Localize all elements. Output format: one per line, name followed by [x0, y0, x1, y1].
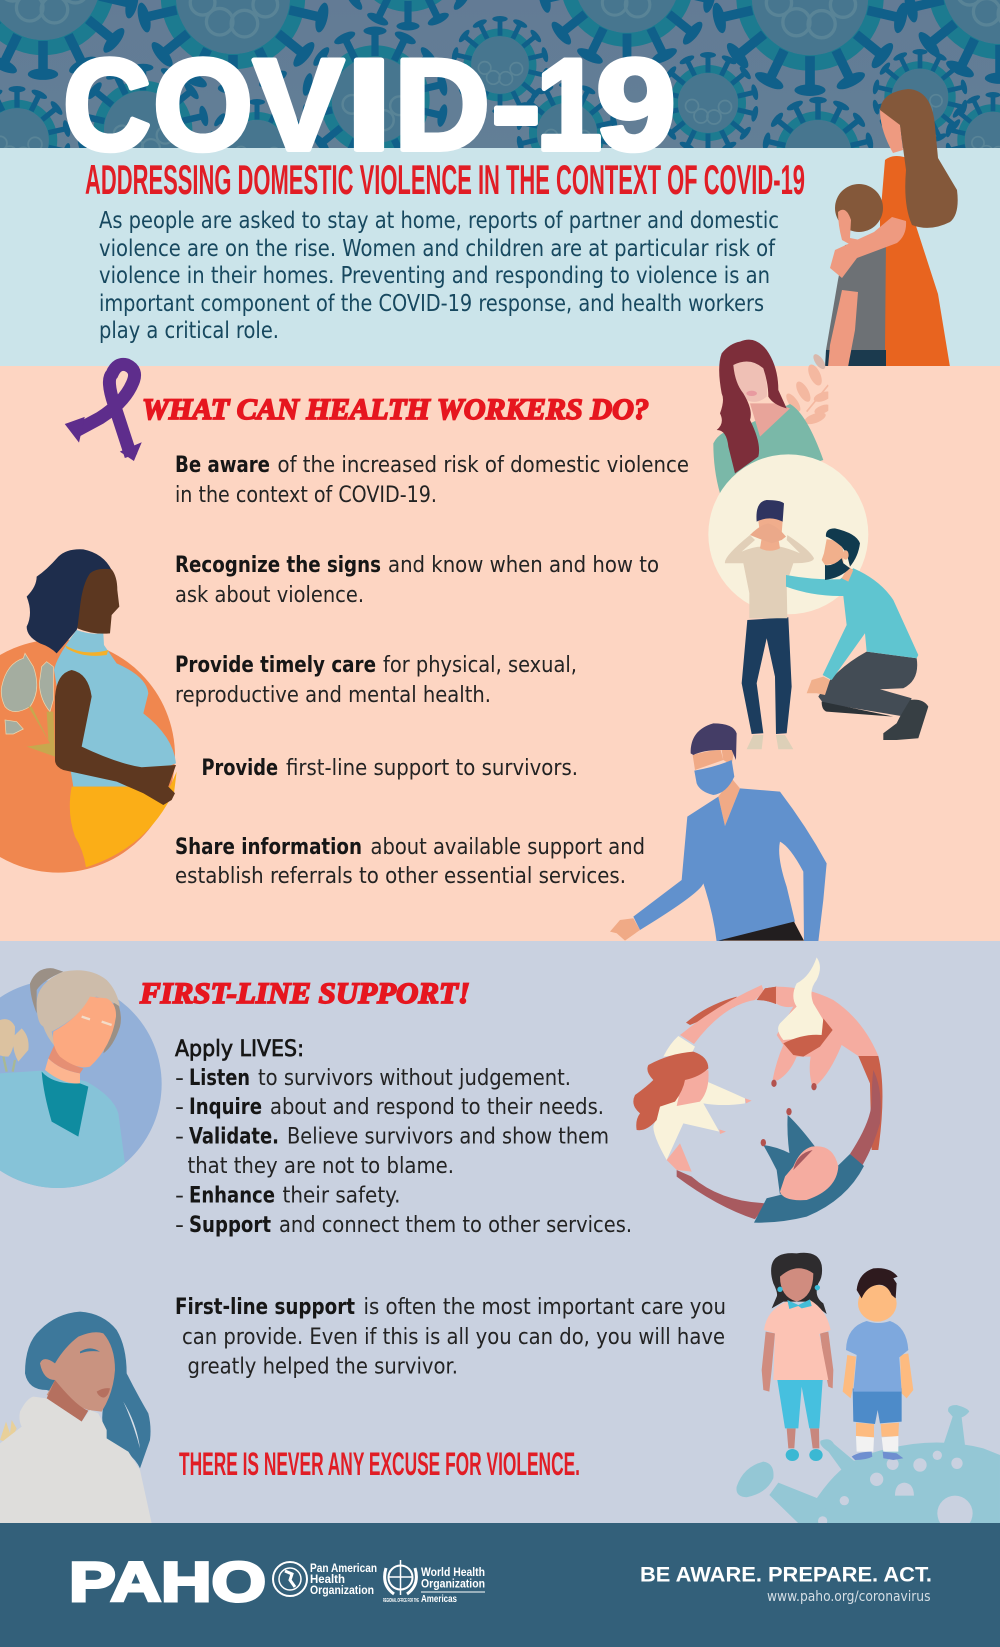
list: apply LIVES: - [175, 1184, 184, 1208]
illustration: woman with red hair [713, 340, 833, 493]
text block: recognize the signs: ask about violence. [175, 583, 364, 608]
illustration: man comforting another man [708, 454, 928, 749]
text block: first-line support note: is often the most important care you [364, 1295, 726, 1320]
logo: PAHO: Health [310, 1572, 345, 1586]
text block: provide timely care [175, 653, 577, 708]
text block: introduction paragraph: violence are on the rise. Women and children are at particular risk of [99, 236, 776, 262]
text block: first-line support note: greatly helped the survivor. [188, 1354, 458, 1380]
callout: never any excuse: THERE IS NEVER ANY EXCUSE FOR VIOLENCE. [179, 1446, 580, 1482]
title: COVID-19: C [63, 32, 151, 178]
illustration: pregnant woman [0, 549, 177, 873]
text block: introduction paragraph [99, 208, 779, 344]
title: COVID-19: O [153, 32, 253, 178]
text block: provide first-line support: first-line support to survivors. [286, 756, 578, 781]
heading: what can health workers do: WHAT CAN HEALTH WORKERS DO? [142, 393, 649, 426]
panel: introduction [0, 89, 1000, 367]
logo: PAHO [69, 1550, 377, 1613]
icon: purple ribbon [68, 364, 138, 458]
logo: World Health Organization: Organization [421, 1576, 485, 1590]
title: COVID-19 [63, 32, 676, 178]
list: apply LIVES [175, 1037, 632, 1238]
list: apply LIVES: their safety. [282, 1184, 400, 1208]
text block: recognize the signs: Recognize the signs [175, 553, 381, 578]
text block: first-line support note: First-line support [175, 1295, 355, 1320]
list: apply LIVES: - [175, 1095, 184, 1120]
title: COVID-19: - [491, 32, 541, 178]
logo: World Health Organization: Americas [421, 1594, 457, 1605]
list: apply LIVES: - [175, 1213, 184, 1238]
list: apply LIVES: Enhance [189, 1184, 275, 1208]
text block: provide first-line support: Provide [202, 756, 278, 781]
text block: first-line support note: can provide. Even if this is all you can do, you will have [182, 1325, 725, 1350]
text block: share information [175, 835, 645, 889]
text block: share information: Share information [175, 835, 362, 860]
text block: recognize the signs: and know when and how to [388, 553, 659, 578]
panel: virus header [0, 0, 1000, 209]
list: apply LIVES: and connect them to other services. [279, 1213, 632, 1238]
list: apply LIVES: - [175, 1066, 184, 1091]
illustration: elderly woman [0, 968, 162, 1188]
text block: be aware: of the increased risk of domestic violence [278, 453, 689, 478]
text block: provide timely care: for physical, sexual, [383, 653, 577, 678]
panel: what can health workers do [0, 340, 1000, 942]
text block: provide timely care: Provide timely care [175, 653, 376, 678]
illustration: woman with teal hair [0, 1312, 152, 1523]
text block: recognize the signs [175, 553, 659, 608]
title: COVID-19: I [346, 32, 392, 178]
text block: first-line support note [175, 1295, 726, 1380]
illustration: two children [762, 1253, 913, 1461]
illustration: man wearing mask [610, 723, 827, 942]
logo: PAHO: PAHO [69, 1550, 266, 1613]
title: COVID-19: V [253, 32, 344, 178]
text: website: www.paho.org/coronavirus [767, 1589, 930, 1605]
panel: first-line support [0, 941, 1000, 1531]
text block: introduction paragraph: important component of the COVID-19 response, and health workers [99, 291, 764, 317]
text block: be aware: Be aware [175, 453, 270, 478]
title: COVID-19: 1 [536, 32, 602, 178]
text block: be aware [175, 453, 689, 508]
text block: introduction paragraph: As people are asked to stay at home, reports of partner and domestic [99, 208, 779, 234]
icon: WHO emblem [385, 1560, 416, 1595]
heading: first-line support: FIRST-LINE SUPPORT! [139, 977, 470, 1010]
tagline: be aware prepare act: BE AWARE. PREPARE. ACT. [640, 1564, 932, 1586]
illustration: virus under children [736, 1405, 1000, 1531]
list: apply LIVES: Believe survivors and show them [287, 1124, 609, 1150]
list: apply LIVES: Inquire [189, 1095, 262, 1120]
text block: be aware: in the context of COVID-19. [175, 483, 437, 508]
text block: share information: establish referrals to other essential services. [175, 864, 626, 889]
logo: PAHO: Organization [310, 1583, 374, 1597]
list: apply LIVES: Listen [189, 1066, 250, 1091]
list: apply LIVES: that they are not to blame. [188, 1154, 454, 1179]
title: COVID-19: 9 [596, 32, 676, 178]
list: apply LIVES: to survivors without judgement. [258, 1066, 571, 1091]
text block: provide timely care: reproductive and mental health. [175, 683, 491, 708]
list: apply LIVES: Validate. [189, 1124, 279, 1150]
icon: PAHO emblem [273, 1562, 307, 1596]
text block: share information: about available support and [370, 835, 645, 860]
title: COVID-19: D [394, 32, 490, 178]
logo: World Health Organization [383, 1560, 485, 1605]
text block: introduction paragraph: play a critical role. [99, 318, 279, 344]
list: apply LIVES: Apply LIVES: [175, 1037, 304, 1062]
text block: introduction paragraph: violence in their homes. Preventing and responding to violence is an [99, 263, 770, 289]
list: apply LIVES: Support [189, 1213, 271, 1238]
logo: World Health Organization: World Health [421, 1565, 485, 1579]
logo: World Health Organization: REGIONAL OFFICE FOR THE [383, 1598, 419, 1604]
list: apply LIVES: about and respond to their needs. [270, 1095, 604, 1120]
illustration: circle of women holding hands [633, 957, 882, 1223]
panel: footer [0, 1523, 1000, 1647]
illustration: mother and child [825, 89, 958, 367]
list: apply LIVES: - [175, 1124, 184, 1150]
logo: PAHO: Pan American [310, 1561, 377, 1575]
